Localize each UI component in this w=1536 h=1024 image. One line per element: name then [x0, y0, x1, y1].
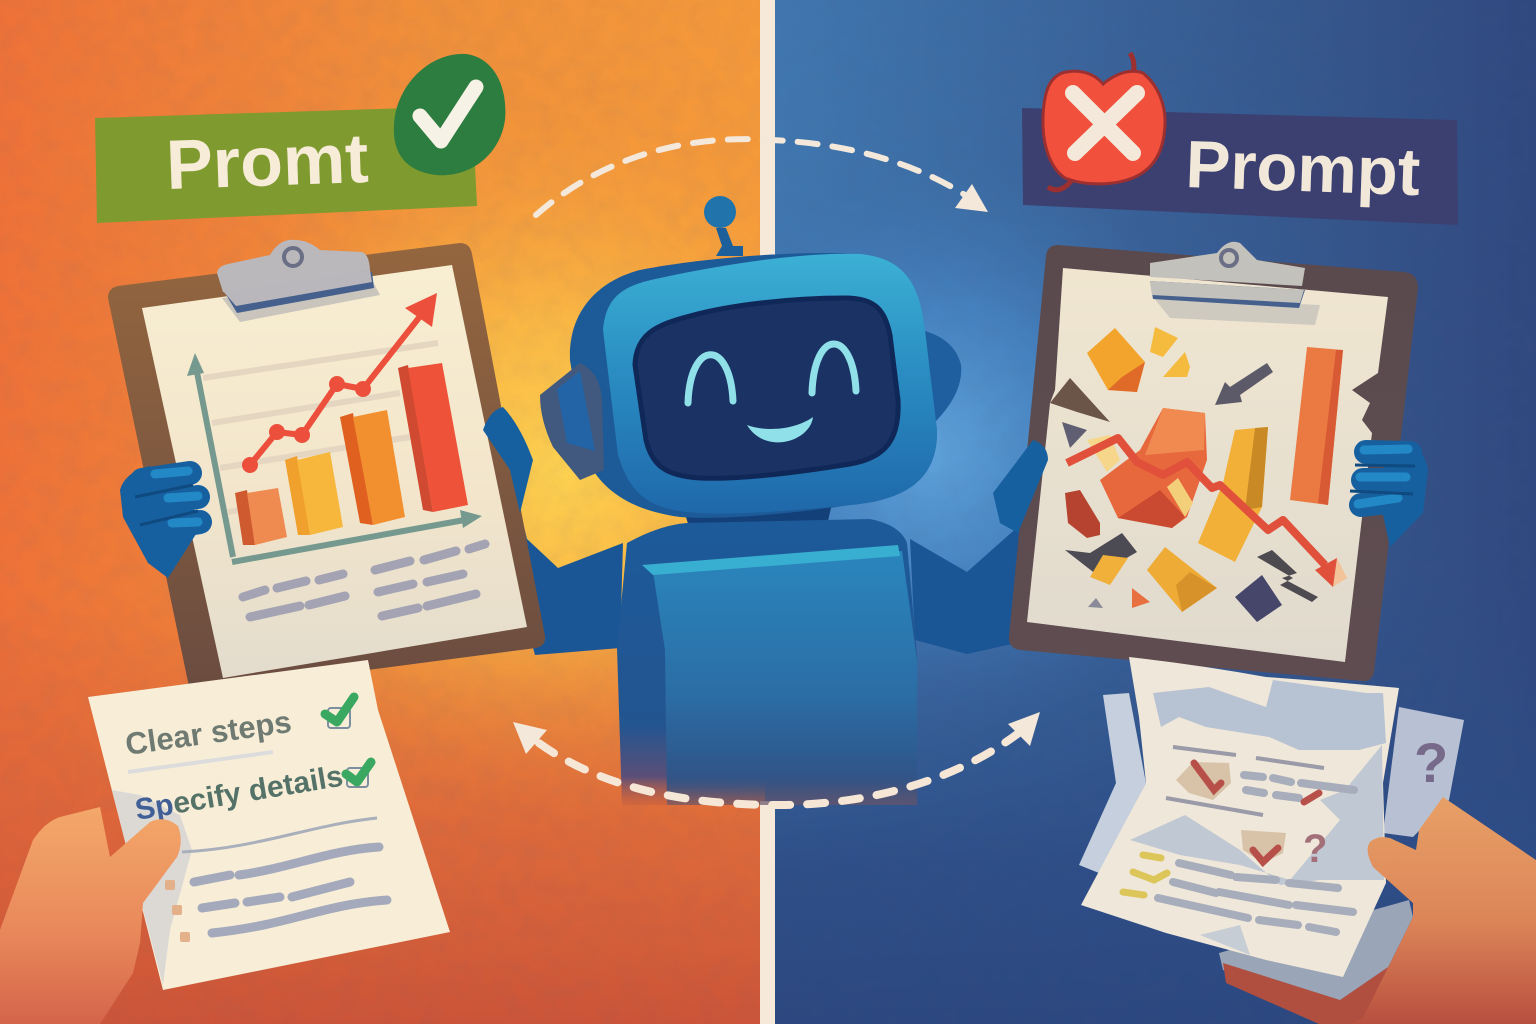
clipboard board	[1009, 245, 1418, 681]
heading banner: Promt: Promt	[165, 119, 370, 204]
robot right ear	[925, 331, 961, 427]
red trend line	[242, 293, 437, 473]
robot screen	[635, 298, 898, 478]
note text: Clear steps: Clear steps	[123, 704, 293, 762]
icon: red marks	[1194, 763, 1319, 862]
bar chart	[235, 363, 468, 545]
robot antenna	[704, 196, 743, 256]
heading banner: Promt	[95, 106, 477, 223]
falling red trend arrow	[1067, 438, 1347, 587]
chart grid lines	[203, 343, 438, 512]
robot eyes	[688, 344, 856, 403]
note: clear checklist	[88, 660, 450, 990]
robot head back	[570, 253, 937, 518]
clip shadow	[1153, 297, 1320, 325]
arrow: dashed bottom arc	[513, 712, 1040, 805]
clipboard clip	[1150, 242, 1305, 308]
robot arms	[485, 470, 1045, 655]
clipboard board	[108, 243, 545, 692]
back question mark: ?	[1414, 731, 1448, 794]
paper shading	[112, 790, 192, 985]
note: crumpled papers	[1079, 657, 1464, 1024]
left hand holding note	[0, 807, 181, 1024]
robot neck	[680, 490, 835, 542]
heading banner: Prompt	[1022, 108, 1458, 225]
clipboard clip	[217, 240, 374, 313]
robot	[540, 196, 961, 805]
robot left ear	[540, 363, 604, 480]
heading banner: Prompt: Prompt	[1184, 127, 1421, 210]
robot thumb: left clipboard	[483, 407, 533, 513]
right hand holding papers	[1350, 797, 1536, 1024]
placeholder lines	[1166, 747, 1324, 815]
robot torso	[617, 519, 917, 805]
torn paper	[1027, 268, 1388, 662]
robot hand: right clipboard glove	[1350, 442, 1428, 547]
yellow marks	[1123, 855, 1167, 895]
note lines	[128, 752, 387, 942]
torn corner	[1050, 378, 1110, 422]
note text: Specify details: Specify details	[133, 760, 345, 827]
clip shadow	[222, 280, 380, 322]
clipboard: broken chart	[1009, 242, 1418, 681]
placeholder text lines	[243, 544, 485, 617]
clipboard: good chart	[108, 240, 545, 692]
icon: check one	[325, 697, 354, 728]
stains	[1176, 762, 1286, 863]
clipboard paper	[142, 265, 527, 678]
hand palm under stack	[1223, 950, 1413, 1024]
icon: red cross badge	[1043, 53, 1165, 190]
question mark: ?	[1303, 827, 1327, 871]
arrow: dashed top arc	[536, 139, 988, 215]
robot hand: left clipboard glove	[120, 466, 205, 578]
crumple shading	[1130, 680, 1386, 955]
back sheets	[1079, 693, 1146, 873]
note paper	[88, 660, 450, 990]
chart axes	[187, 353, 482, 562]
background: right blue panel	[765, 0, 1536, 1024]
robot head bezel	[603, 254, 937, 514]
robot thumb: right clipboard	[993, 440, 1048, 533]
background: left warm panel	[0, 0, 765, 1024]
icon: green check badge	[394, 54, 505, 175]
robot smile	[747, 417, 813, 442]
centre divider	[760, 0, 775, 1024]
icon: check two	[346, 762, 371, 787]
broken shapes	[1062, 327, 1343, 622]
front sheet	[1081, 657, 1399, 977]
